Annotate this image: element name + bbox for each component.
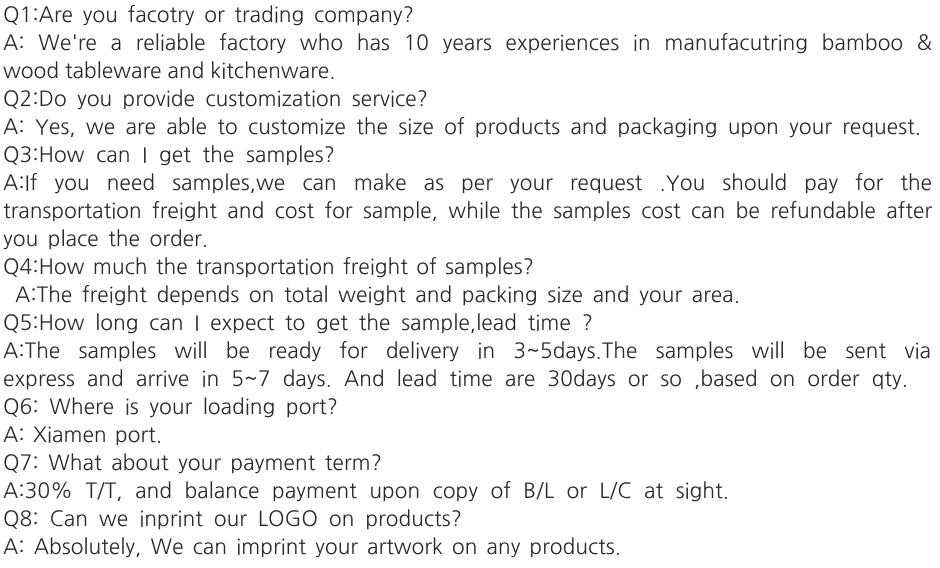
answer 8: A: Absolutely, We can imprint your artwork on any products. bbox=[3, 537, 621, 558]
question and answer 7 bbox=[3, 453, 729, 502]
question 4: Q4:How much the transportation freight of samples? bbox=[3, 257, 534, 278]
question and answer 5 bbox=[3, 313, 931, 390]
answer 3 bbox=[3, 173, 932, 250]
question and answer 6 bbox=[3, 397, 338, 446]
answer 6: A: Xiamen port. bbox=[3, 425, 162, 446]
question and answer 8 bbox=[3, 509, 621, 558]
question and answer 1 bbox=[3, 5, 932, 82]
answer 1 bbox=[3, 33, 932, 82]
answer 4: A:The freight depends on total weight and packing size and your area. bbox=[15, 285, 740, 306]
answer 3: A:If you need samples,we can make as per your request .You should pay for the bbox=[3, 173, 932, 194]
question 5: Q5:How long can I expect to get the sample,lead time ? bbox=[3, 313, 593, 334]
question 1: Q1:Are you facotry or trading company? bbox=[3, 5, 414, 26]
answer 3: transportation freight and cost for sample, while the samples cost can be refundable after bbox=[3, 201, 932, 222]
question 7: Q7: What about your payment term? bbox=[3, 453, 382, 474]
answer 5 bbox=[3, 341, 931, 390]
question 6: Q6: Where is your loading port? bbox=[3, 397, 338, 418]
question and answer 3 bbox=[3, 145, 932, 250]
question and answer 4 bbox=[3, 257, 740, 306]
question 2: Q2:Do you provide customization service? bbox=[3, 89, 428, 110]
answer 3: you place the order. bbox=[3, 229, 208, 250]
answer 5: A:The samples will be ready for delivery in 3~5days.The samples will be sent via bbox=[3, 341, 931, 362]
answer 2: A: Yes, we are able to customize the size of products and packaging upon your request. bbox=[3, 117, 921, 138]
answer 5: express and arrive in 5~7 days. And lead time are 30days or so ,based on order qty. bbox=[3, 369, 908, 390]
question 3: Q3:How can I get the samples? bbox=[3, 145, 335, 166]
question and answer 2 bbox=[3, 89, 921, 138]
question 8: Q8: Can we inprint our LOGO on products? bbox=[3, 509, 462, 530]
answer 7: A:30% T/T, and balance payment upon copy of B/L or L/C at sight. bbox=[3, 481, 729, 502]
answer 1: wood tableware and kitchenware. bbox=[3, 61, 336, 82]
answer 1: A: We're a reliable factory who has 10 years experiences in manufacutring bamboo & bbox=[3, 33, 932, 54]
